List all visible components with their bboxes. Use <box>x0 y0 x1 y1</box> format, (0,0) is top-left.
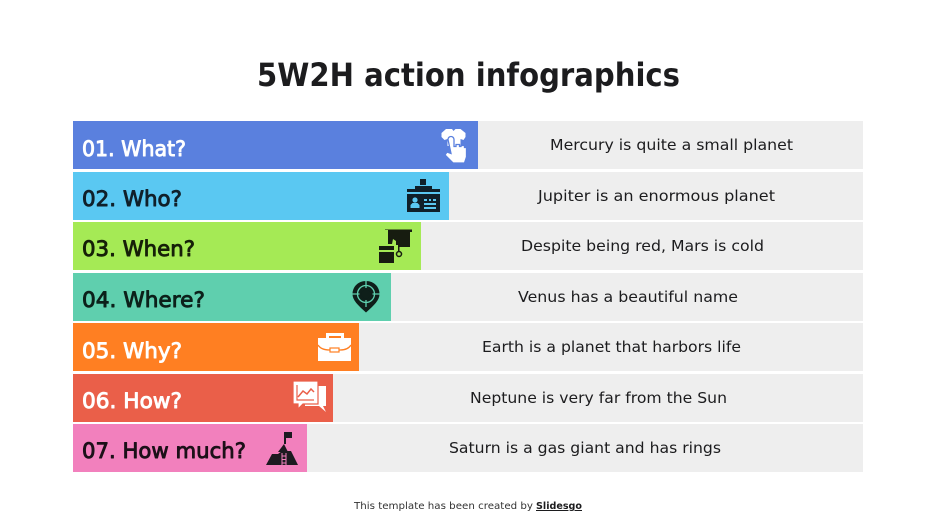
row 4: where: 04. Where? <box>82 288 205 313</box>
icon: mountain with flag <box>266 432 298 465</box>
icon: presentation board <box>379 230 412 263</box>
row 3: when <box>73 222 863 270</box>
text: when: Despite being red, Mars is cold <box>521 237 764 255</box>
icon: target location pin <box>352 281 380 312</box>
footer credit: Slidesgo <box>536 501 582 512</box>
row 7: how much: 07. How much? <box>82 439 246 464</box>
text: why: Earth is a planet that harbors life <box>482 338 741 356</box>
text: how: Neptune is very far from the Sun <box>470 389 727 407</box>
row 1: what <box>73 121 863 169</box>
row 3: when: 03. When? <box>82 237 195 262</box>
row 6: how: 06. How? <box>82 389 182 414</box>
text: how much: Saturn is a gas giant and has rings <box>449 439 721 457</box>
footer credit: This template has been created by <box>353 501 533 512</box>
icon: chart speech bubbles <box>293 381 326 412</box>
row 4: where <box>73 273 863 321</box>
text: what: Mercury is quite a small planet <box>550 136 793 154</box>
row 2: who <box>73 172 863 220</box>
row 5: why: 05. Why? <box>82 339 182 364</box>
row 2: who: 02. Who? <box>82 187 182 212</box>
text: where: Venus has a beautiful name <box>518 288 738 306</box>
row 5: why <box>73 323 863 371</box>
icon: briefcase <box>318 333 351 361</box>
row 6: how <box>73 374 863 422</box>
row 1: what: 01. What? <box>82 137 186 162</box>
row 7: how much <box>73 424 863 472</box>
icon: hand tapping shirt <box>442 129 466 163</box>
title: 5W2H action infographics <box>257 56 680 94</box>
text: who: Jupiter is an enormous planet <box>537 187 775 205</box>
icon: id badge <box>407 179 440 212</box>
